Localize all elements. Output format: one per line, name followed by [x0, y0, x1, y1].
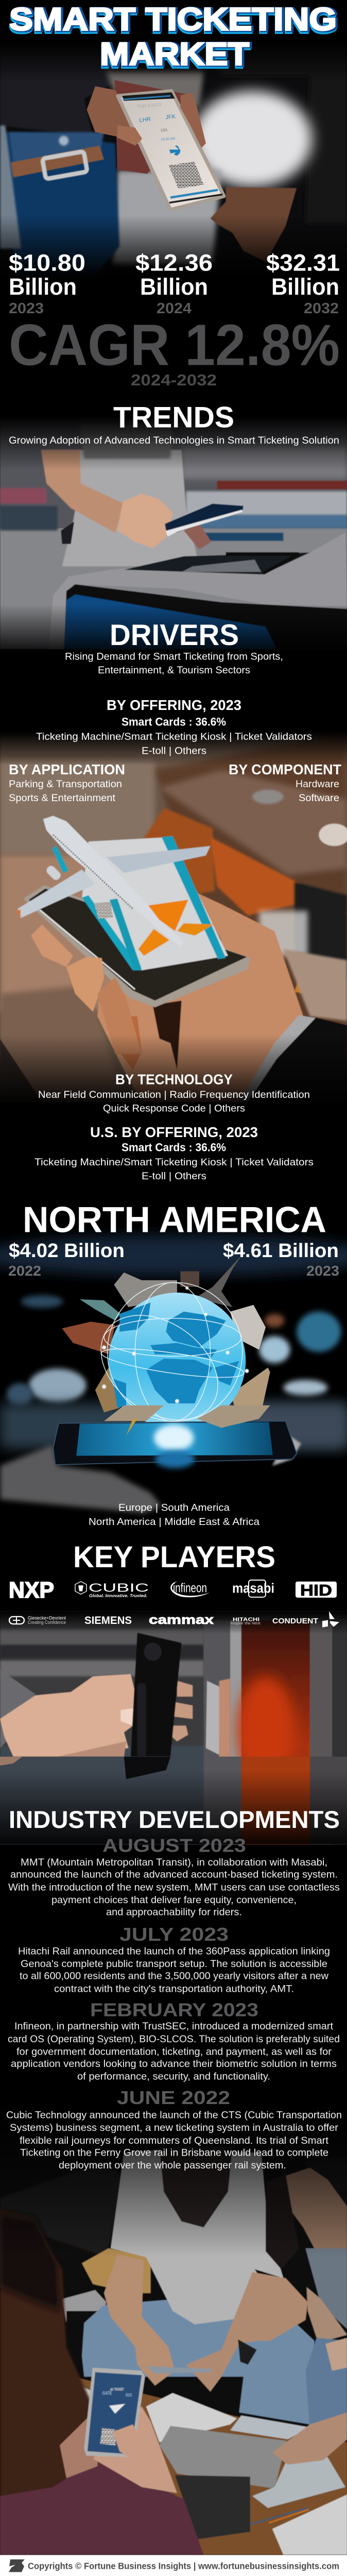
- logo: HID: HID: [300, 1582, 332, 1599]
- logo: Cubic: [75, 1581, 149, 1598]
- north america heading: NORTH AMERICA: [23, 1200, 326, 1240]
- development: August 2023: AUGUST 2023: [102, 1835, 246, 1856]
- panel: photo of friends planning with phone ticket and maps: [0, 2108, 347, 2555]
- phone under the globe held by hand: [0, 1405, 301, 1513]
- heading: trends: [9, 400, 339, 446]
- development: June 2022: Systems) business segment, a new ticketing system in Australia to offer: [10, 2123, 339, 2133]
- market value 2024: $12.36: [135, 250, 213, 276]
- logo: Giesecke+Devrient: [9, 1616, 66, 1625]
- development: July 2023: JULY 2023: [119, 1924, 229, 1945]
- panel: photo of friends planning with phone ticket and maps: air TICKET: [110, 2388, 124, 2392]
- title: [9, 1, 337, 72]
- regional value 2023: 2023: [306, 1263, 339, 1279]
- logo: HID: [296, 1582, 337, 1599]
- market value 2032: 2032: [304, 301, 339, 317]
- development: February 2023: of performance, security, and functionality.: [77, 2071, 270, 2082]
- development: February 2023: for government documentation, ticketing, and payment, as well as for: [16, 2046, 332, 2057]
- logo: Cubic: Global. Innovative. Trusted.: [89, 1593, 147, 1598]
- development: July 2023: contract with the city's transportation authority, AMT.: [54, 1984, 294, 1994]
- development: February 2023: card OS (Operating System), BIO-SLCOS. The solution is preferably suited: [8, 2033, 340, 2045]
- market value 2023: [9, 250, 85, 317]
- title: SMART TICKETING: [9, 1, 337, 37]
- development: July 2023: to all 600,000 residents and the 3,500,000 yearly visitors after a new: [20, 1971, 329, 1981]
- development: June 2022: Cubic Technology announced the launch of the CTS (Cubic Transportation: [6, 2110, 342, 2121]
- text block: by component: Software: [299, 793, 339, 804]
- regional value 2022: 2022: [8, 1263, 41, 1279]
- development: August 2023: MMT (Mountain Metropolitan Transit), in collaboration with Masabi,: [21, 1857, 327, 1868]
- panel: photo of plane and tickets rising from a phone: [0, 732, 347, 1102]
- text block: by application: Sports & Entertainment: [9, 793, 115, 804]
- regional value 2022: [8, 1240, 125, 1279]
- heading: drivers: DRIVERS: [110, 618, 239, 652]
- development: February 2023: FEBRUARY 2023: [90, 2000, 258, 2020]
- development: July 2023: [18, 1924, 330, 1994]
- panel: photo of hand holding phone to a gate reader: [0, 1612, 347, 1844]
- text block: by technology: Near Field Communication | Radio Frequency Identification: [38, 1090, 310, 1100]
- logo: Hitachi: HITACHI: [233, 1617, 259, 1622]
- market value 2032: [266, 250, 340, 317]
- development: June 2022: deployment over the whole passenger rail system.: [59, 2160, 286, 2171]
- heading: drivers: [65, 618, 283, 676]
- panel: hero photo of hands passing a phone boarding pass: JFK: [165, 113, 176, 121]
- text block: U.S. by offering: U.S. BY OFFERING, 2023: [90, 1124, 258, 1140]
- development: August 2023: [8, 1835, 340, 1918]
- logo: Masabi: masabi: [232, 1581, 274, 1596]
- CAGR figure: 2024-2032: [131, 371, 217, 389]
- development: August 2023: announced the launch of the advanced account-based ticketing system.: [10, 1869, 338, 1880]
- title: MARKET: [100, 36, 249, 72]
- text block: U.S. by offering: Ticketing Machine/Smart Ticketing Kiosk | Ticket Validators: [34, 1157, 314, 1168]
- market value 2024: Billion: [140, 274, 208, 300]
- development: February 2023: application vendors looking to advance their biometric solution in terms: [11, 2059, 337, 2070]
- market value 2032: $32.31: [266, 250, 340, 276]
- panel: hero photo of hands passing a phone boarding pass: LHR: [139, 116, 151, 124]
- text block: by offering: Smart Cards : 36.6%: [122, 716, 226, 728]
- text block: by component: Hardware: [296, 778, 339, 790]
- regions list: [89, 1502, 260, 1528]
- photo continuation above industry developments: [0, 1757, 347, 1844]
- logo: Infineon: [170, 1581, 210, 1597]
- text block: by component: BY COMPONENT: [229, 761, 341, 777]
- logo: Siemens: SIEMENS: [84, 1615, 132, 1626]
- text block: by component: [229, 761, 341, 804]
- text block: by technology: [38, 1071, 310, 1114]
- heading: trends: TRENDS: [113, 400, 234, 434]
- text block: by offering: [36, 697, 312, 756]
- logo: Conduent: [272, 1611, 339, 1628]
- development: June 2022: [6, 2088, 342, 2171]
- heading: drivers: Rising Demand for Smart Ticketing from Sports,: [65, 651, 283, 662]
- text block: by offering: BY OFFERING, 2023: [107, 697, 241, 713]
- regions list: Europe | South America: [118, 1502, 230, 1513]
- market value 2024: [135, 250, 213, 317]
- panel: hero photo of hands passing a phone boarding pass: 10:30 AM: [161, 137, 175, 142]
- logo: Giesecke+Devrient: Creating Confidence: [28, 1620, 66, 1625]
- heading: trends: Growing Adoption of Advanced Technologies in Smart Ticketing Solution: [9, 435, 339, 446]
- panel: hero photo of hands passing a phone boarding pass: 18A: [160, 127, 168, 133]
- regional value 2022: $4.02 Billion: [9, 1240, 125, 1262]
- panel: hero photo of hands passing a phone boarding pass: [0, 41, 347, 278]
- text block: by application: BY APPLICATION: [9, 761, 125, 777]
- text block: U.S. by offering: Smart Cards : 36.6%: [122, 1141, 226, 1154]
- panel: photo of friends planning with phone ticket and maps: GATE: [102, 2391, 112, 2396]
- regional value 2023: $4.61 Billion: [223, 1240, 339, 1262]
- market value 2023: $10.80: [9, 250, 85, 276]
- market value 2024: 2024: [157, 301, 192, 317]
- text block: by offering: Ticketing Machine/Smart Ticketing Kiosk | Ticket Validators: [36, 731, 312, 742]
- market value 2023: Billion: [9, 274, 77, 300]
- development: June 2022: Ticketing on the Ferny Grove rail in Brisbane would lead to complete: [20, 2147, 328, 2158]
- logo: Infineon: infineon: [173, 1581, 207, 1595]
- panel: photo of friends planning with phone ticket and maps: D15: [126, 2392, 132, 2398]
- development: February 2023: [8, 2000, 340, 2082]
- development: July 2023: Genoa's complete public transport setup. The solution is accessible: [21, 1958, 327, 1970]
- market value 2023: 2023: [9, 301, 44, 317]
- text block: U.S. by offering: [34, 1124, 314, 1182]
- regions list: North America | Middle East & Africa: [89, 1516, 260, 1528]
- panel: globe with landmarks on phone photo: [0, 1235, 347, 1448]
- heading: drivers: Entertainment, & Tourism Sectors: [98, 665, 250, 676]
- logo: Cammax: cammax: [149, 1614, 214, 1627]
- panel: trends photo of hand scanning phone at kiosk: [0, 416, 347, 649]
- logo: Conduent: CONDUENT: [272, 1617, 318, 1625]
- text block: by application: Parking & Transportation: [9, 778, 122, 790]
- logo: Cubic: CUBIC: [89, 1581, 149, 1594]
- development: August 2023: and approachability for riders.: [106, 1907, 242, 1918]
- development: June 2022: JUNE 2022: [117, 2088, 230, 2108]
- logo: NXP: NXP: [9, 1578, 54, 1603]
- development: August 2023: With the introduction of the new system, MMT users can use contactless: [8, 1882, 340, 1893]
- development: August 2023: payment choices that deliver fare equity, convenience,: [51, 1894, 297, 1906]
- development: July 2023: Hitachi Rail announced the launch of the 360Pass application linking: [18, 1946, 330, 1957]
- panel: hero photo of hands passing a phone boarding pass: Flight EJ1073: [137, 102, 162, 109]
- text block: by offering: E-toll | Others: [142, 745, 206, 756]
- heading: key players: KEY PLAYERS: [73, 1540, 275, 1574]
- logo: Hitachi: Inspire the Next: [231, 1621, 261, 1625]
- text block: U.S. by offering: E-toll | Others: [142, 1171, 206, 1182]
- development: June 2022: flexible rail journeys for commuters of Queensland. Its trial of Smart: [20, 2135, 329, 2146]
- logo: Giesecke+Devrient: Giesecke+Devrient: [28, 1616, 66, 1621]
- footer: [0, 2555, 347, 2576]
- text block: by technology: Quick Response Code | Others: [103, 1103, 245, 1114]
- text block: by application: [9, 761, 125, 804]
- text block: by technology: BY TECHNOLOGY: [115, 1071, 233, 1087]
- market value 2032: Billion: [271, 274, 339, 300]
- development: February 2023: Infineon, in partnership with TrustSEC, introduced a modernized smart: [14, 2021, 334, 2032]
- logo: Hitachi: [231, 1617, 261, 1625]
- regional value 2023: [223, 1240, 339, 1279]
